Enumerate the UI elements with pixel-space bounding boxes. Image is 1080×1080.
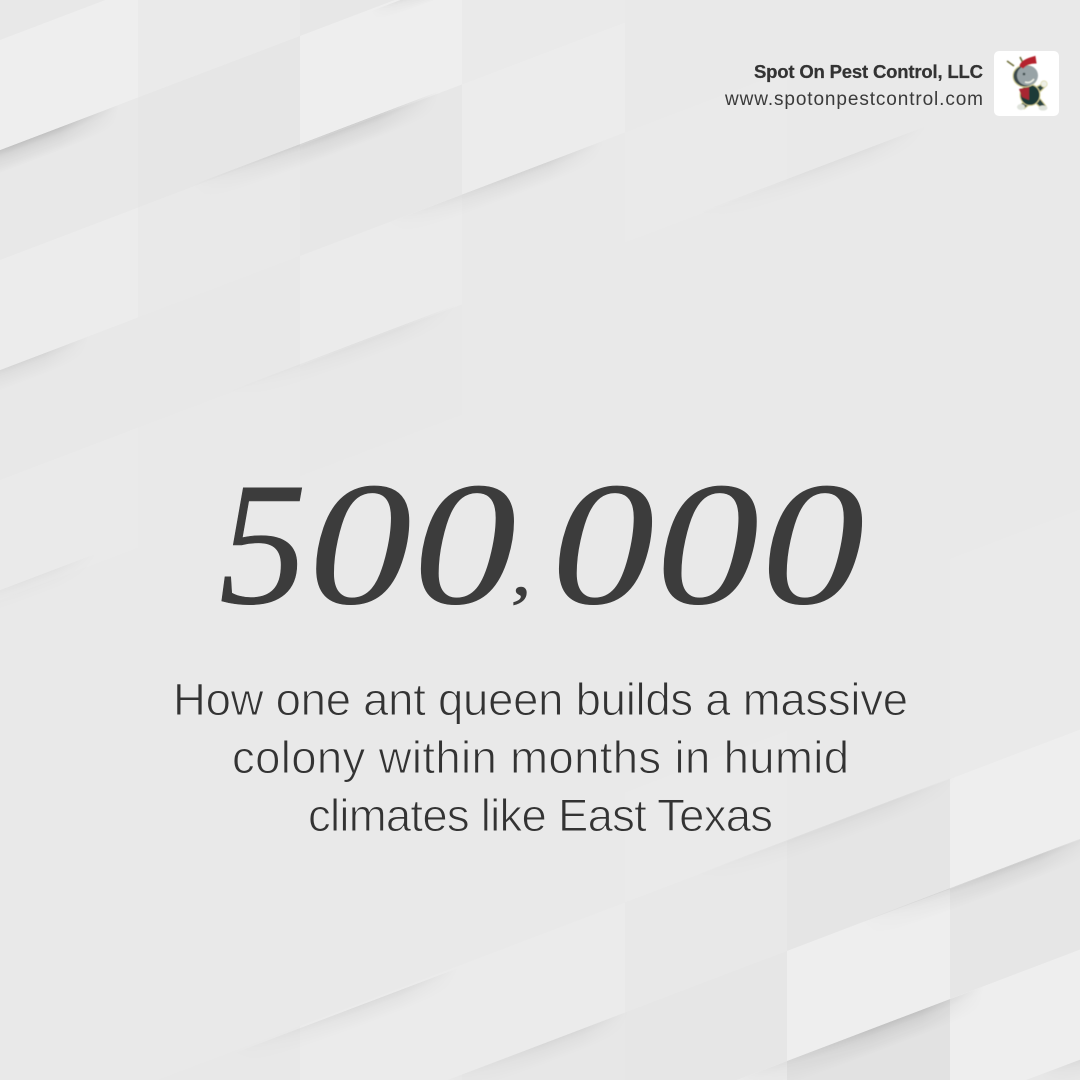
big number: 5	[219, 447, 307, 642]
big number: 0	[761, 447, 864, 642]
head	[1013, 65, 1037, 87]
legs and arm	[1019, 96, 1046, 109]
big number: 0	[413, 447, 516, 642]
hands and feet	[1041, 81, 1047, 87]
line 1: How one ant queen builds a massive	[173, 674, 908, 725]
big number	[219, 447, 864, 642]
big number: 0	[656, 447, 759, 642]
website: www.spotonpestcontrol.com	[724, 89, 983, 110]
icon: mascot logo	[994, 51, 1059, 116]
big number: 0	[309, 447, 412, 642]
line 3: climates like East Texas	[308, 790, 773, 841]
cap	[1020, 56, 1036, 68]
big number: 0	[551, 447, 654, 642]
description text	[173, 674, 908, 841]
brand name: Spot On Pest Control, LLC	[754, 61, 983, 82]
big number: ,	[511, 532, 531, 610]
line 2: colony within months in humid	[232, 732, 849, 783]
brand block	[724, 51, 1059, 116]
body	[1020, 84, 1040, 106]
